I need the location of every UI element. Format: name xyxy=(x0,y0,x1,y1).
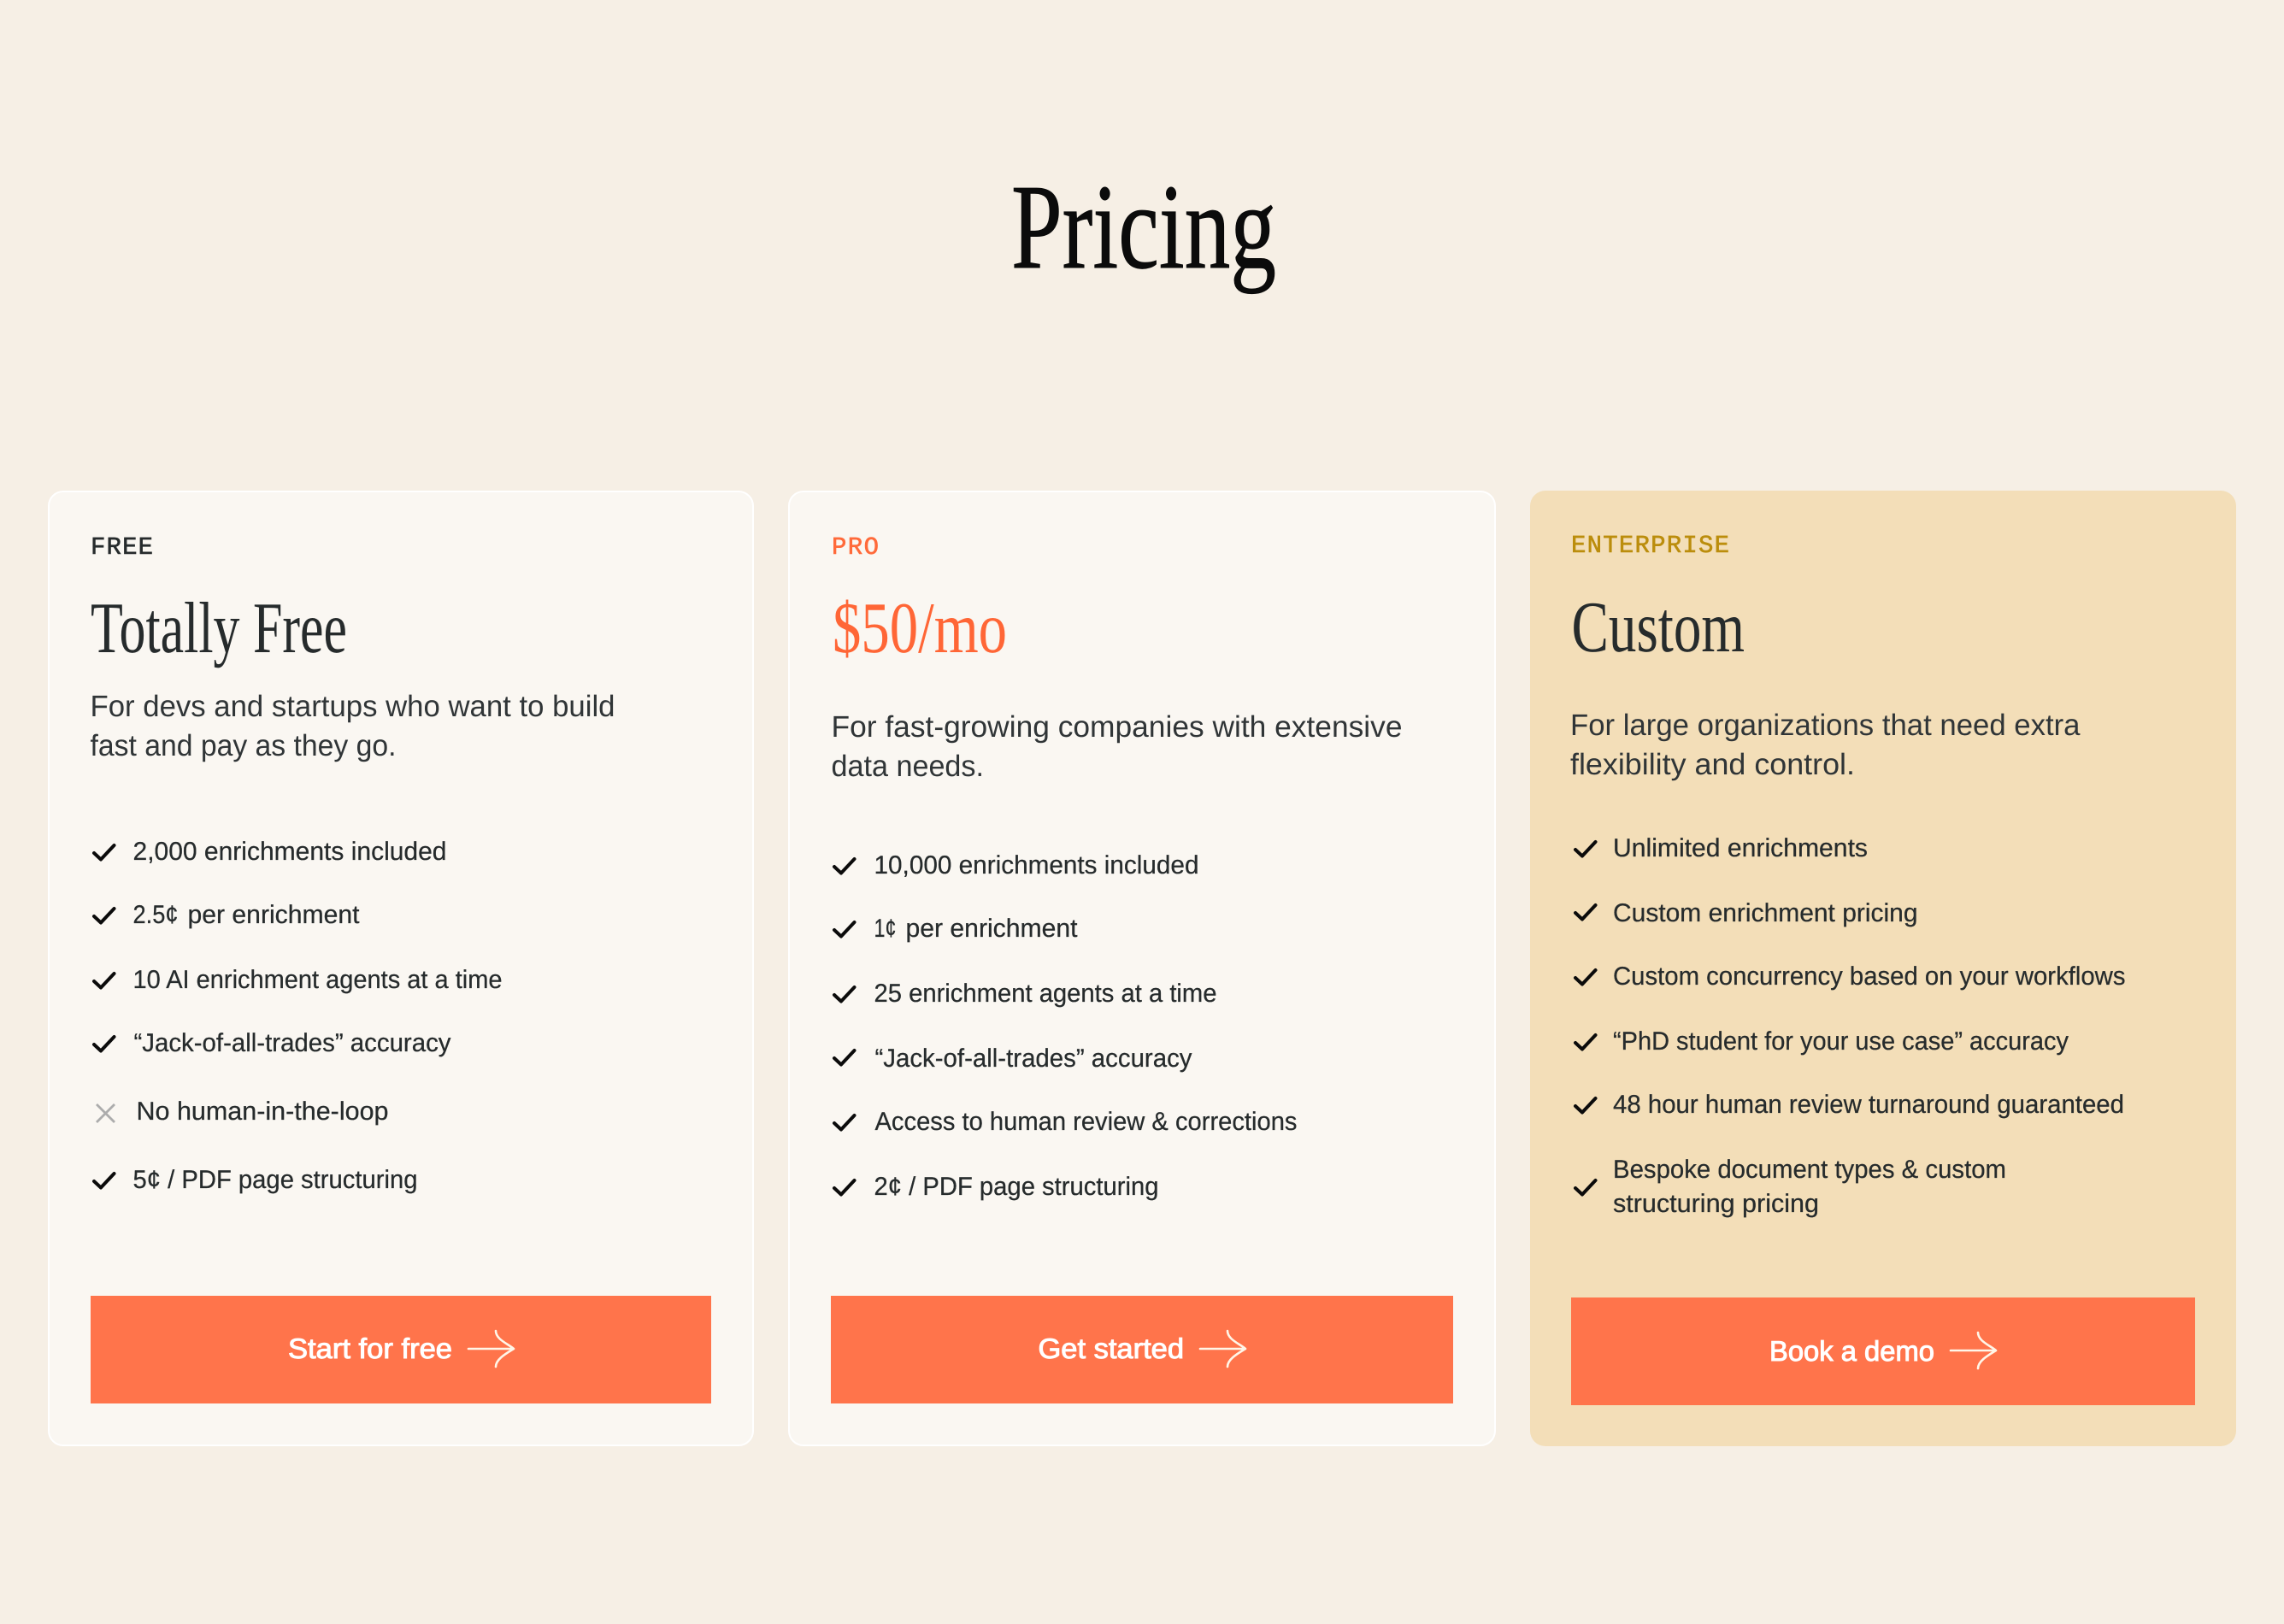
feature: enrichments included xyxy=(834,851,1198,880)
card background xyxy=(49,491,753,1445)
feature: agents at a time xyxy=(834,980,1217,1008)
icon: check xyxy=(834,987,855,1002)
feature: agents at a time xyxy=(94,966,503,994)
icon: cross xyxy=(97,1104,115,1122)
icon: check xyxy=(834,1115,855,1130)
button: book a demo: Book a demo xyxy=(1769,1335,1934,1367)
plan description: For devs and startups who want to build xyxy=(91,690,615,723)
plan label: PRO xyxy=(832,533,879,562)
feature: accuracy xyxy=(1575,1027,2069,1056)
feature text: 10,000 enrichments included xyxy=(874,851,1198,880)
feature text: 5¢ / PDF page structuring xyxy=(133,1166,417,1194)
icon: check xyxy=(94,909,115,923)
button: get started: Get started xyxy=(1038,1333,1184,1364)
panel: enterprise plan xyxy=(1530,491,2236,1446)
feature text: per enrichment xyxy=(906,915,1078,943)
plan description: For large organizations that need extra xyxy=(1570,709,2081,742)
card background xyxy=(1530,491,2236,1446)
feature text: 2,000 enrichments included xyxy=(133,838,446,866)
feature text: 1¢ xyxy=(874,915,896,943)
button: start for free: Start for free xyxy=(288,1333,452,1364)
title: Pricing xyxy=(1011,159,1276,294)
icon: arrow xyxy=(1200,1331,1245,1367)
panel: pro plan xyxy=(789,491,1495,1445)
plan heading: Totally Free xyxy=(91,588,347,668)
feature: review turnaround xyxy=(1575,1091,2124,1119)
feature text: No human-in-the-loop xyxy=(137,1097,388,1126)
feature text: structuring pricing xyxy=(1613,1190,1819,1218)
feature: page structuring xyxy=(94,1166,417,1194)
feature text: 48 hour human review turnaround guaranteed xyxy=(1613,1091,2124,1119)
button: get started xyxy=(831,1296,1453,1403)
icon: check xyxy=(94,1037,115,1051)
icon: arrow xyxy=(468,1331,514,1367)
plan heading: Custom xyxy=(1571,587,1745,668)
feature: enrichments included xyxy=(94,838,446,866)
feature text xyxy=(1613,1156,2006,1218)
card background xyxy=(789,491,1495,1445)
feature text: per enrichment xyxy=(188,901,360,929)
feature text: “PhD student for your use case” accuracy xyxy=(1613,1027,2069,1056)
feature: human review xyxy=(834,1108,1298,1136)
icon: check xyxy=(94,845,115,860)
feature: no human in the loop xyxy=(97,1097,388,1126)
feature text: “Jack-of-all-trades” accuracy xyxy=(875,1044,1192,1073)
feature text: “Jack-of-all-trades” accuracy xyxy=(133,1029,451,1057)
panel: free plan xyxy=(49,491,753,1445)
icon: check xyxy=(1575,1098,1595,1113)
feature text: 2¢ / PDF page structuring xyxy=(874,1173,1159,1201)
icon: check xyxy=(834,1180,855,1195)
plan label: ENTERPRISE xyxy=(1571,532,1729,560)
icon: check xyxy=(834,1050,855,1065)
icon: check xyxy=(834,922,855,937)
plan label: FREE xyxy=(91,533,153,562)
icon: check xyxy=(94,1174,115,1188)
feature text: Custom concurrency based on your workflows xyxy=(1613,962,2125,991)
feature: per enrichment price xyxy=(834,915,1078,943)
button: start for free xyxy=(91,1296,711,1403)
feature: accuracy xyxy=(834,1044,1192,1073)
feature text: 10 AI enrichment agents at a time xyxy=(133,966,503,994)
plan description: flexibility and control. xyxy=(1570,748,1855,781)
feature text: Unlimited enrichments xyxy=(1613,834,1868,862)
feature text: Bespoke document types & custom xyxy=(1613,1156,2006,1184)
icon: check xyxy=(1575,970,1595,985)
feature: per enrichment price xyxy=(94,901,360,929)
plan description: For fast-growing companies with extensive xyxy=(831,710,1402,744)
feature: unlimited enrichments xyxy=(1575,834,1868,862)
button: book a demo xyxy=(1571,1297,2195,1405)
feature: custom pricing xyxy=(1575,899,1918,927)
feature: page structuring xyxy=(834,1173,1159,1201)
plan description xyxy=(91,690,615,762)
feature text: 25 enrichment agents at a time xyxy=(874,980,1217,1008)
icon: check xyxy=(1575,1035,1595,1050)
feature: custom concurrency xyxy=(1575,962,2125,991)
icon: check xyxy=(1575,842,1595,856)
icon: check xyxy=(1575,905,1595,920)
feature: bespoke document types xyxy=(1575,1156,2006,1218)
icon: check xyxy=(1575,1180,1595,1195)
feature: accuracy xyxy=(94,1029,451,1057)
plan price: $50/mo xyxy=(833,588,1007,668)
feature text: Access to human review & corrections xyxy=(875,1108,1298,1136)
plan description xyxy=(831,710,1402,783)
icon: arrow xyxy=(1951,1333,1996,1368)
icon: check xyxy=(94,974,115,988)
plan description: data needs. xyxy=(831,750,984,783)
feature text: Custom enrichment pricing xyxy=(1613,899,1918,927)
icon: check xyxy=(834,859,855,874)
plan description: fast and pay as they go. xyxy=(91,729,397,762)
plan description xyxy=(1570,709,2081,781)
feature text: 2.5¢ xyxy=(133,901,178,929)
